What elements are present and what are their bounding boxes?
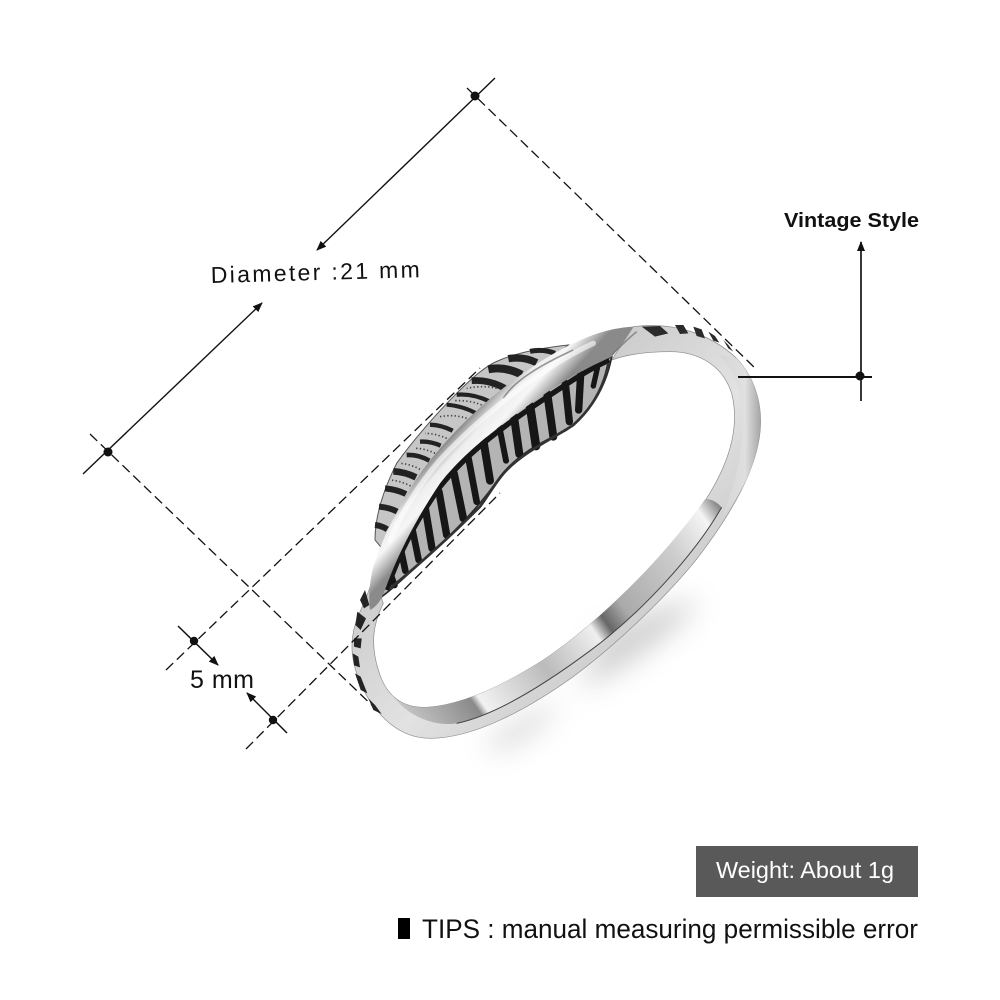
callout: vintage style	[738, 210, 919, 401]
callout vertical arrow	[860, 242, 862, 401]
diameter label: Diameter :21 mm	[210, 256, 420, 288]
upper marker dot	[190, 637, 198, 645]
spine fold shadow	[503, 332, 637, 398]
callout label: Vintage Style	[784, 210, 919, 232]
polished inner strip	[393, 499, 722, 724]
weight text: Weight: About 1g	[716, 857, 894, 883]
lower marker dot	[269, 716, 277, 724]
right rim shading	[717, 353, 761, 517]
bottom measuring line with arrow	[83, 303, 262, 474]
spine highlight	[390, 343, 593, 540]
lower dashed guide	[246, 493, 500, 749]
outer band engraved marks top right	[642, 325, 733, 352]
upper feather stripes	[375, 350, 555, 529]
top tangent dashed line	[467, 88, 757, 370]
upper dashed guide	[166, 368, 480, 670]
outer band engraved marks left	[353, 590, 382, 714]
bottom marker dot	[104, 448, 112, 456]
dimension: width 5 mm	[166, 368, 500, 749]
upper feather stipple	[390, 387, 497, 486]
bottom tangent dashed line	[90, 434, 380, 713]
weight badge	[696, 846, 918, 897]
ring	[352, 325, 761, 738]
callout horizontal leader	[738, 376, 872, 378]
drop shadow under ring	[490, 600, 700, 752]
top marker dot	[470, 92, 480, 100]
width label: 5 mm	[190, 666, 254, 694]
feather bottom edge	[390, 363, 608, 588]
callout dot	[856, 372, 864, 380]
lower feather stripes	[390, 368, 597, 585]
upper feather half	[375, 345, 568, 550]
ring band	[352, 326, 761, 738]
strip edge line	[457, 507, 722, 723]
lower arrow	[247, 693, 287, 733]
top measuring line with arrow	[317, 78, 495, 250]
tips note	[398, 914, 918, 944]
dimension: diameter 21 mm	[83, 78, 757, 713]
feather spine	[369, 327, 633, 610]
lower feather half	[382, 357, 612, 597]
upper arrow	[178, 626, 218, 665]
tips text: TIPS : manual measuring permissible error	[422, 914, 918, 944]
lower feather dark outline	[387, 360, 609, 590]
